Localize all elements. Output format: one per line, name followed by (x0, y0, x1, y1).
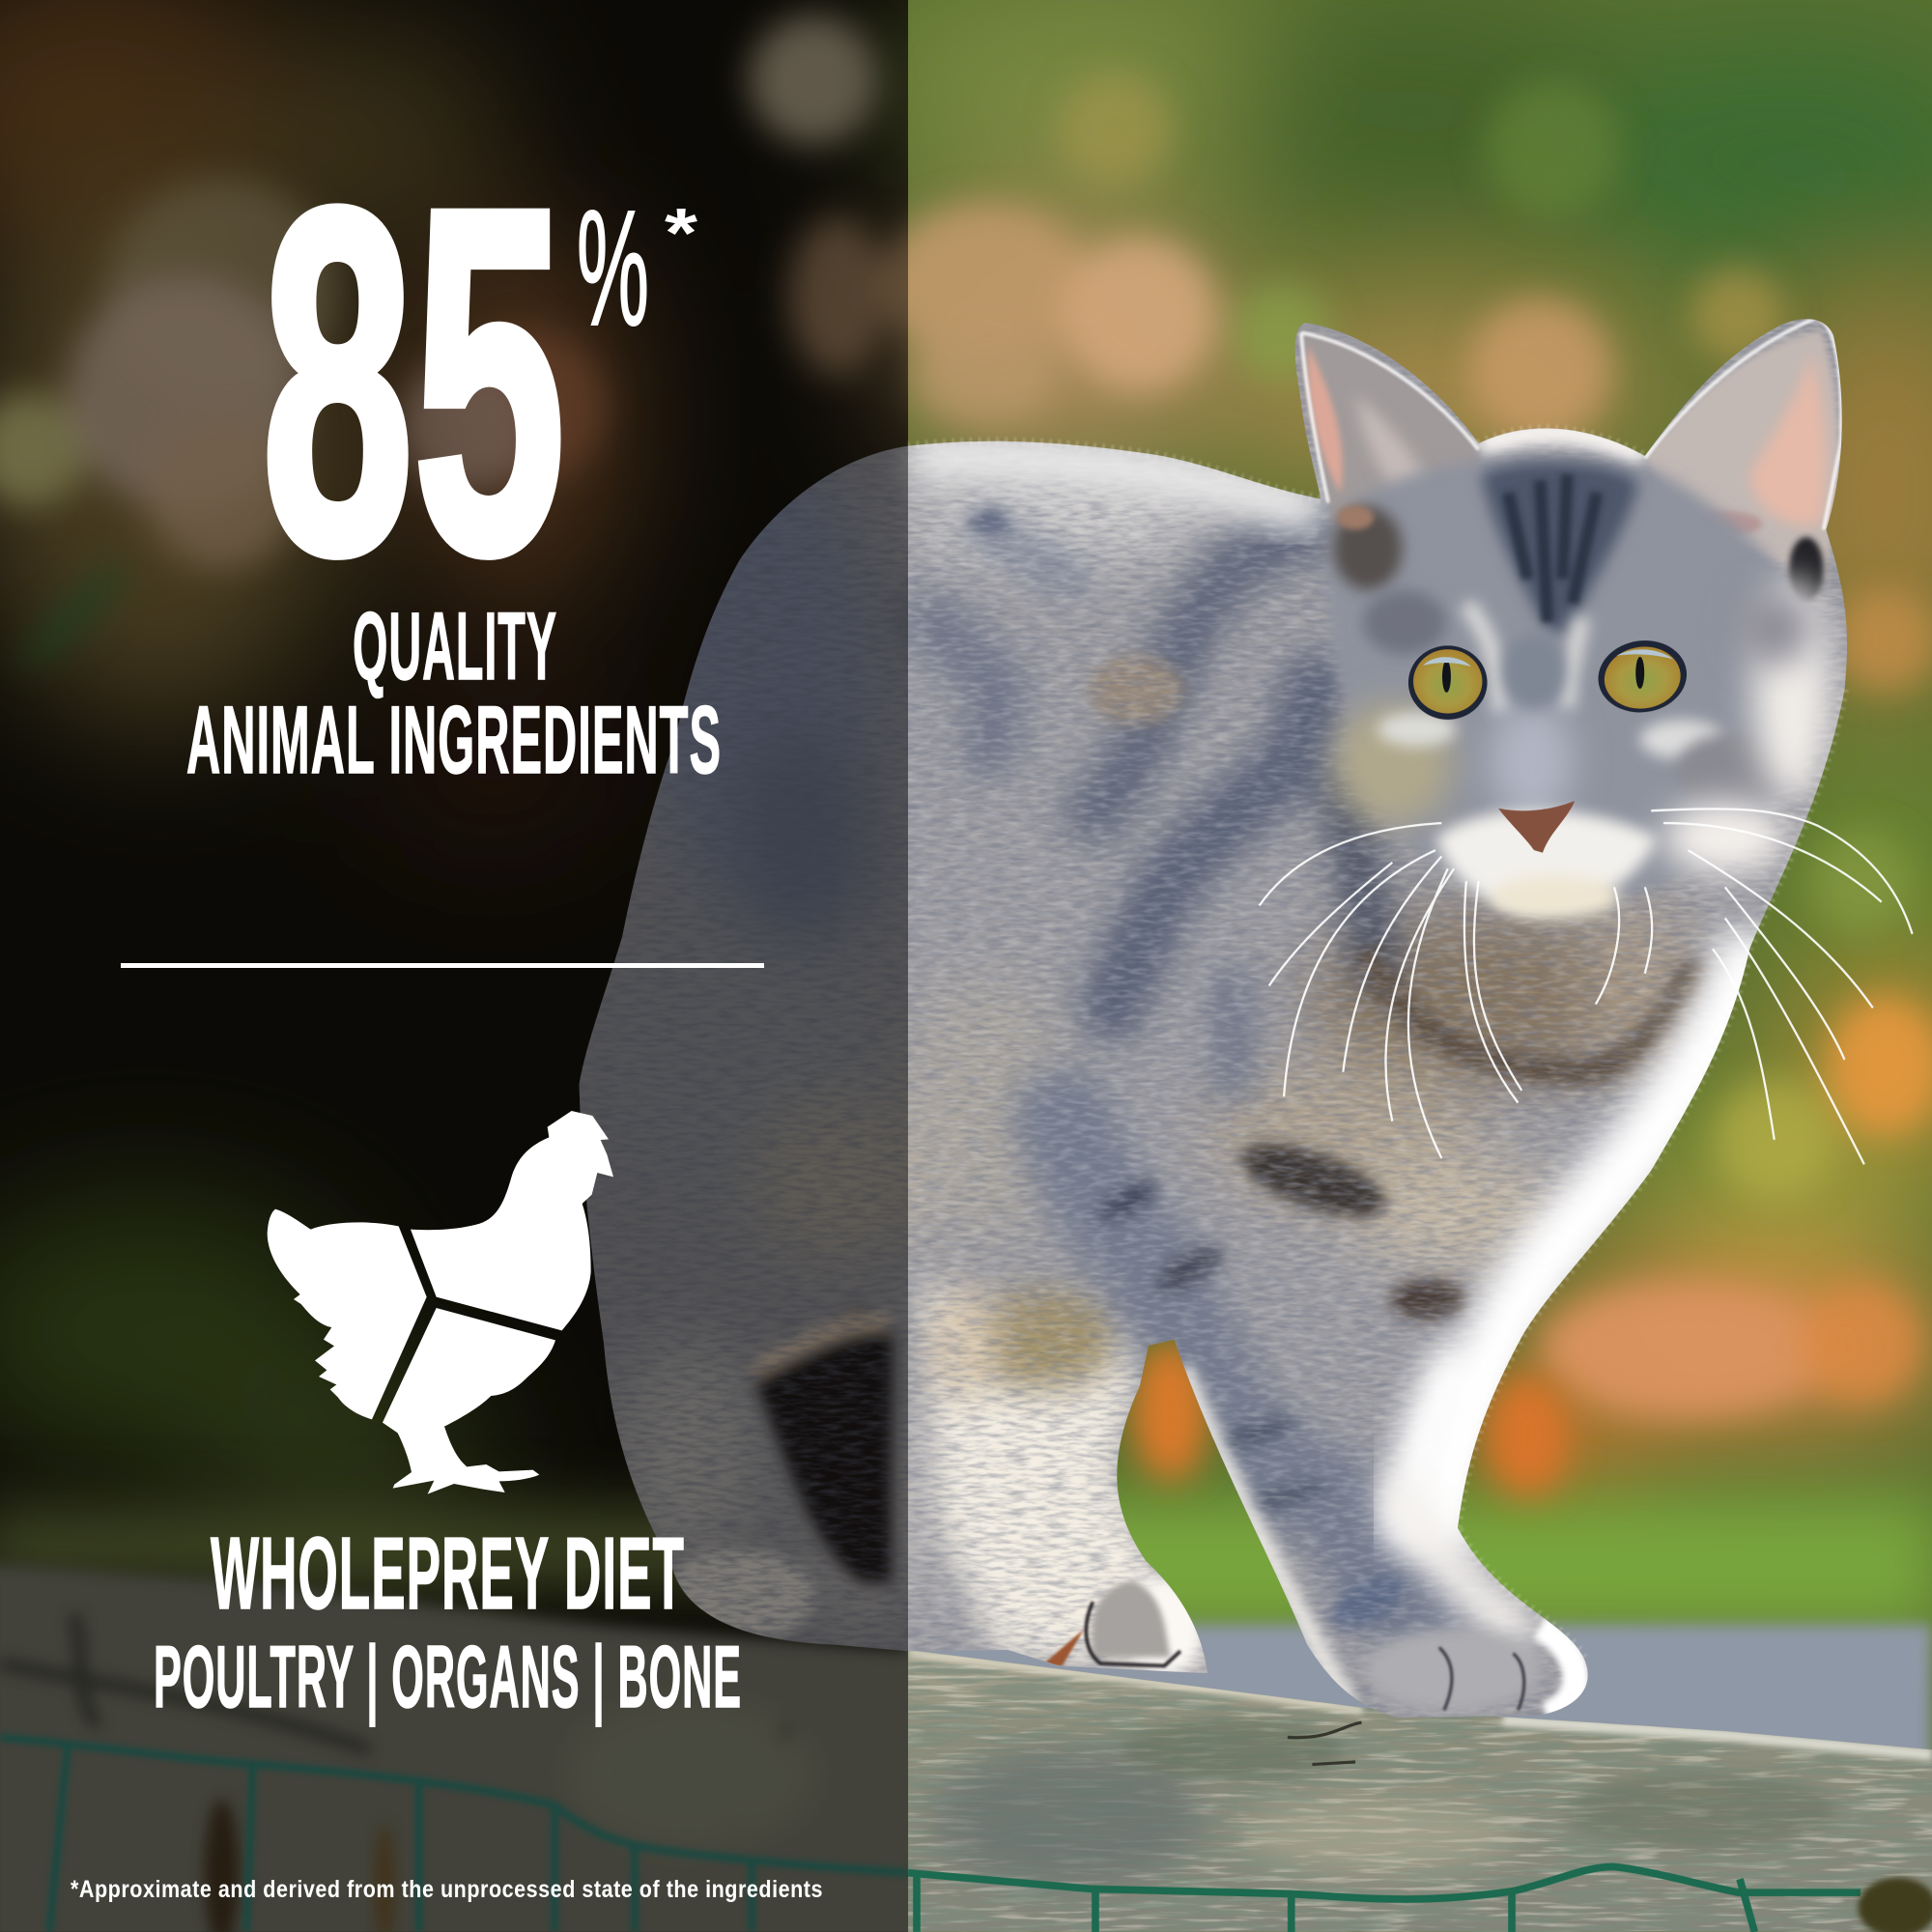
cat: nose (1498, 801, 1575, 853)
cat: whiskers (1260, 809, 1913, 1164)
foreground foliage corner (1858, 1878, 1932, 1932)
text: wholeprey diet: WHOLEPREY DIET (211, 1517, 685, 1631)
cat: left ear (1301, 330, 1481, 579)
infographic canvas: POULTRY | ORGANS | BONE (154, 1629, 742, 1727)
cat: body markings (604, 456, 1688, 1627)
cat (567, 308, 1913, 1725)
cat: fur texture (567, 308, 1861, 1725)
cat: back paw (1041, 1577, 1204, 1676)
cat: right ear (1645, 318, 1841, 579)
wooden fence rail (0, 1562, 1932, 1932)
blurred wire section behind panel (0, 1737, 908, 1932)
infographic canvas: ANIMAL INGREDIENTS (186, 686, 722, 793)
heading: 85 percent statistic: % (577, 177, 649, 360)
cat: face (1326, 458, 1833, 918)
subheading: quality animal ingredients (186, 592, 722, 793)
big number 85: 85 (262, 109, 565, 654)
dark translucent left panel (0, 0, 908, 1932)
heading: 85 percent statistic (262, 109, 697, 654)
cat: rear white leg (918, 1282, 1213, 1676)
muzzle (1435, 810, 1658, 912)
asterisk: * (665, 195, 697, 272)
cat: left eye (1408, 645, 1488, 720)
icon: chicken divided into three sections (268, 1111, 613, 1494)
footnote: *Approximate and derived from the unprocessed state of the ingredients (71, 1876, 823, 1903)
background: lawn band (0, 1497, 1932, 1633)
cat: right eye (1594, 635, 1691, 718)
cat: front paw (1365, 1627, 1576, 1716)
cat: tabby stripes (934, 526, 1424, 1616)
brow and nose bridge highlights (1466, 604, 1580, 712)
background: road (908, 1624, 1932, 1772)
subheading: quality animal ingredients: QUALITY (353, 592, 557, 699)
wire fence (0, 1737, 1861, 1932)
cat: backlit fur fringe (908, 428, 1844, 1658)
cat: backlit white rim (1435, 936, 1762, 1552)
